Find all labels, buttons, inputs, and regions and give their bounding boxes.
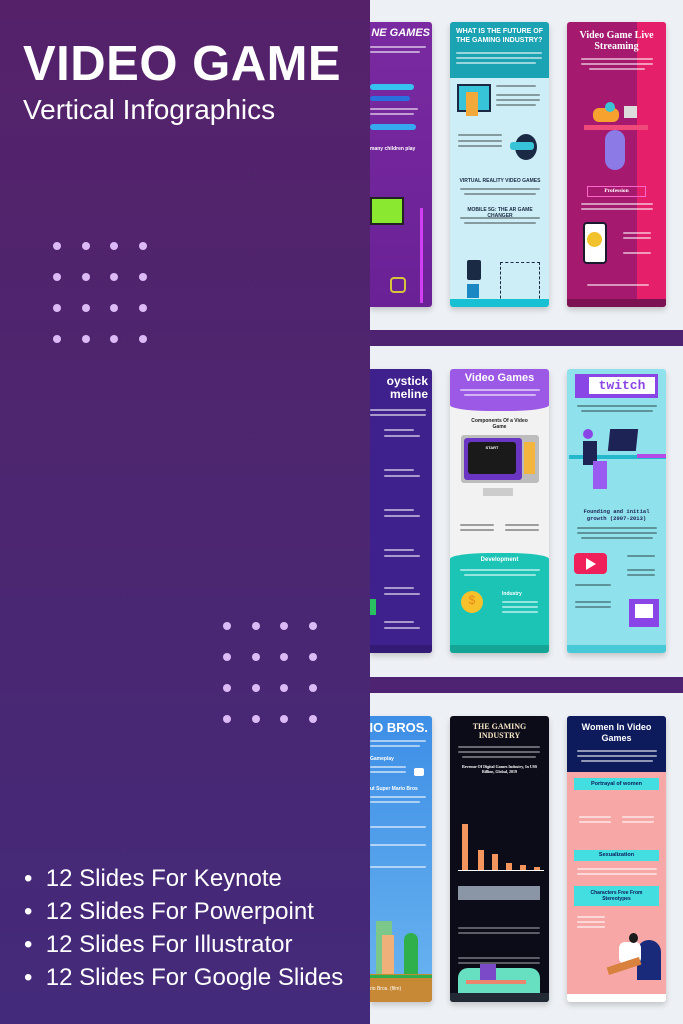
card: twitch: growth (2007-2013) [587, 515, 646, 522]
panel: left hero [0, 0, 370, 1024]
card: video game live streaming: Video Game Live [579, 30, 654, 41]
card: women in video games: Women In Video [582, 722, 651, 732]
card: video games components: Video Games [465, 372, 534, 384]
card: mario bros [370, 716, 432, 1002]
card: video games components: START [485, 445, 499, 450]
card: future of gaming industry: MOBILE 5G: THE AR GAME CHANGER [467, 207, 533, 219]
card: women in video games: Characters Free From [591, 890, 642, 896]
bullet list: • 12 Slides For Google Slides [24, 964, 343, 991]
card: video games components: Industry [502, 591, 522, 597]
card: mario bros: rio Bros. (film) [370, 986, 401, 992]
card: joystick timeline: oystick [387, 374, 428, 388]
card: online games [370, 22, 432, 307]
card: mario bros: ut Super Mario Bros [370, 786, 418, 792]
card: video games components: Game [493, 424, 506, 430]
card: video game live streaming [567, 22, 666, 307]
card: future of gaming industry [450, 22, 549, 307]
card: future of gaming industry: WHAT IS THE FUTURE OF [456, 28, 543, 35]
decorative dot grid bottom [223, 622, 317, 723]
card: the gaming industry [450, 716, 549, 1002]
card: women in video games [567, 716, 666, 1002]
card: women in video games: Portrayal of women [591, 781, 642, 787]
decorative dot grid top [53, 242, 147, 343]
card: online games: many children play [370, 146, 415, 152]
card: women in video games: Games [601, 733, 632, 743]
card: video games components: $ [469, 593, 475, 607]
card: online games: NE GAMES [371, 27, 430, 39]
card: video games components [450, 369, 549, 653]
bullet list [24, 865, 343, 991]
divider band row 2 [370, 677, 683, 693]
bullet list: • 12 Slides For Powerpoint [24, 898, 314, 925]
card: the gaming industry: Revenue Of Digital Games Industry, In US$ [462, 764, 537, 769]
card: the gaming industry: Billion, Global, 2019 [482, 769, 517, 774]
card: joystick timeline [370, 369, 432, 653]
card: twitch [567, 369, 666, 653]
card: twitch: Founding and initial [583, 508, 650, 515]
card: women in video games: Stereotypes [602, 896, 631, 902]
card: video game live streaming: Streaming [594, 41, 639, 52]
bar chart [458, 824, 544, 871]
card: the gaming industry: INDUSTRY [479, 731, 520, 740]
card: twitch: twitch [599, 378, 645, 393]
card: mario bros: IO BROS. [370, 720, 428, 735]
bullet list: • 12 Slides For Illustrator [24, 931, 292, 958]
bullet list: • 12 Slides For Keynote [24, 865, 282, 892]
card: future of gaming industry: THE GAMING INDUSTRY? [456, 37, 542, 44]
card: mario bros: Gameplay [370, 756, 394, 762]
divider band row 1 [370, 330, 683, 346]
title: VIDEO GAME [23, 37, 341, 91]
card: video game live streaming: Profession [604, 188, 629, 194]
card: video games components: Development [481, 557, 518, 563]
subtitle: Vertical Infographics [23, 94, 275, 125]
card: future of gaming industry: VIRTUAL REALITY VIDEO GAMES [460, 178, 540, 184]
card: the gaming industry: THE GAMING [473, 722, 526, 731]
card: women in video games: Sexualization [599, 852, 634, 858]
card: joystick timeline: meline [390, 387, 428, 401]
card: video games components: Components Of a Video [471, 418, 528, 424]
